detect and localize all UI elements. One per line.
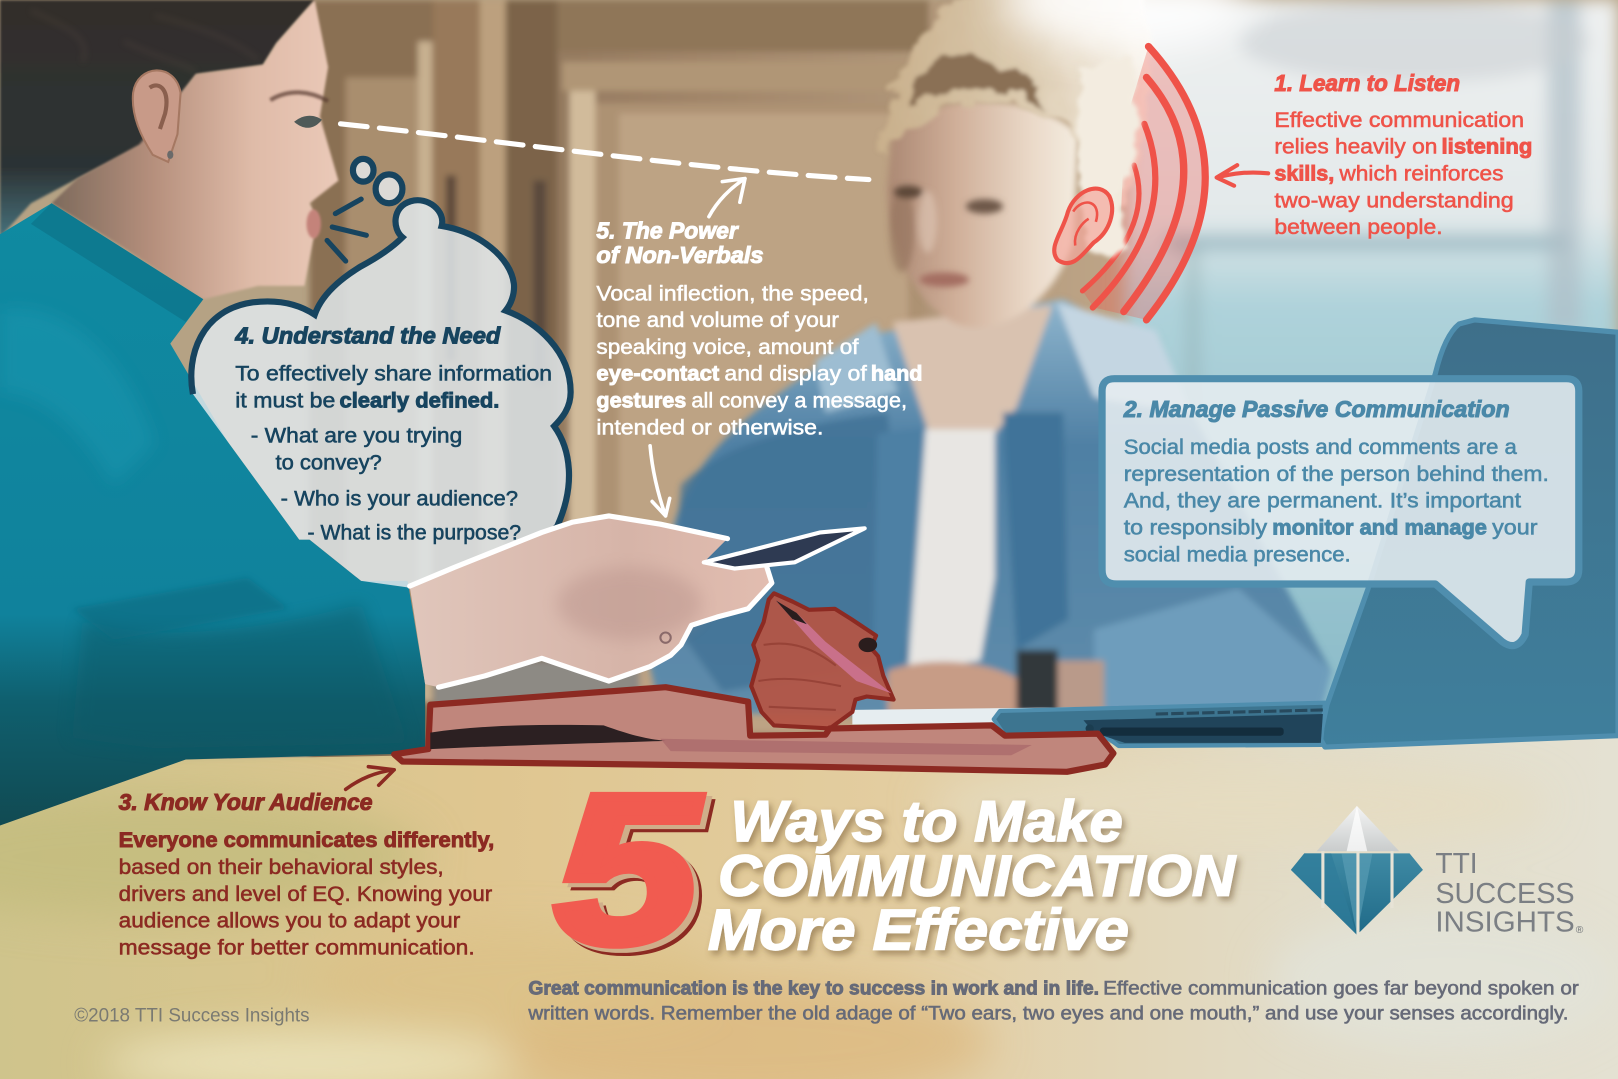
laptop base — [994, 703, 1325, 746]
ring — [660, 633, 671, 643]
panel: 5 the power of non-verbals — [596, 179, 923, 516]
title block — [555, 751, 1236, 994]
panel: 2 manage passive communication speech bubble — [1102, 379, 1579, 646]
wordmark: ® — [1576, 925, 1584, 936]
text: social media copy: to responsibly — [1124, 514, 1267, 539]
laptop highlighted in blue — [852, 320, 1618, 747]
text: listening copy — [1274, 107, 1532, 239]
panel: 4 thought bubble — [191, 159, 571, 588]
text: bubble copy: To effectively share information — [235, 361, 552, 386]
big numeral 5: 5 — [555, 751, 702, 987]
sweater — [0, 203, 425, 825]
heading: Ways to Make Communication More Effective: COMMUNICATION — [718, 845, 1236, 909]
hand outline — [410, 516, 772, 687]
shirt — [629, 299, 1331, 717]
brow, eye, lips — [270, 92, 328, 238]
heading: Ways to Make Communication More Effective — [708, 790, 1236, 962]
heading: Ways to Make Communication More Effective: Ways to Make — [731, 790, 1123, 854]
thought circles — [353, 159, 402, 203]
text: non-verbals copy — [596, 280, 923, 439]
intro text — [527, 979, 1579, 1024]
arrow up to sight line — [709, 179, 745, 217]
text: bubble copy: clearly defined. — [339, 388, 499, 413]
text: non-verbals copy: Vocal inflection, the speed, — [596, 280, 869, 305]
icon: sound waves around ear — [1082, 46, 1205, 320]
text: listening copy: which reinforces — [1338, 161, 1504, 186]
hand fill — [410, 516, 772, 687]
text: listening copy: two-way understanding — [1274, 187, 1514, 212]
photo: woman on the left — [0, 0, 425, 825]
big numeral 5: 5 — [563, 758, 710, 994]
big numeral 5: 5 — [560, 755, 707, 991]
text: bubble copy: - What is the purpose? — [308, 520, 521, 545]
text: audience copy: audience allows you to adapt your — [119, 908, 460, 933]
text: social media copy: your — [1492, 514, 1538, 539]
text: non-verbals copy: speaking voice, amount of — [596, 334, 860, 359]
wordmark — [1435, 848, 1584, 939]
hair — [0, 0, 315, 237]
pen — [776, 601, 892, 693]
text: non-verbals copy: all convey a message, — [691, 388, 907, 413]
heading: Learn to Listen: 1. Learn to Listen — [1274, 70, 1460, 96]
text: social media copy: And, they are permanent. It’s important — [1124, 488, 1521, 513]
placket — [1003, 413, 1068, 650]
speech bubble — [1102, 379, 1579, 646]
heading: The Power of Non-Verbals: of Non-Verbals — [596, 242, 764, 268]
heading: Understand the Need: 4. Understand the Need — [234, 323, 502, 349]
wordmark: TTI — [1435, 848, 1478, 880]
text: non-verbals copy: hand — [871, 361, 923, 386]
text: listening copy: skills, — [1274, 161, 1334, 186]
notebook and papers highlighted in red — [394, 593, 1113, 772]
text: bubble copy: - What are you trying — [251, 423, 462, 448]
thought bubble outline — [191, 200, 571, 543]
heading: The Power of Non-Verbals: 5. The Power — [596, 217, 739, 243]
icon: diamond — [1291, 806, 1423, 935]
speech tick marks — [327, 199, 366, 261]
intro text: Great communication is the key to success in work and in life. — [528, 979, 1099, 1000]
text: bubble copy: - Who is your audience? — [281, 486, 518, 511]
text: listening copy: relies heavily on — [1274, 134, 1437, 159]
logo: TTI Success Insights — [1291, 806, 1584, 939]
table surface — [0, 735, 1618, 1079]
red hand holding pen — [751, 593, 894, 728]
icon: ear — [1054, 189, 1112, 263]
thought bubble fill — [191, 200, 571, 588]
text: social media copy — [1124, 434, 1549, 566]
laptop lid — [1320, 320, 1618, 747]
heading: The Power of Non-Verbals — [596, 217, 764, 268]
tablet strip — [852, 707, 1105, 724]
text: listening copy: Effective communication — [1274, 107, 1524, 132]
text: non-verbals copy: eye-contact — [596, 361, 719, 386]
phone — [704, 528, 865, 569]
hand with phone outlined in white — [410, 516, 865, 687]
text: non-verbals copy: gestures — [596, 388, 686, 413]
heading: Manage Passive Communication: 2. Manage Passive Communication — [1123, 396, 1510, 422]
intro text: Effective communication goes far beyond spoken or — [1103, 979, 1579, 1000]
face and neck — [52, 0, 338, 299]
text: listening copy: between people. — [1274, 214, 1443, 239]
text: listening copy: listening — [1442, 134, 1532, 159]
text: social media copy: Social media posts and comments are a — [1124, 434, 1518, 459]
text: non-verbals copy: intended or otherwise. — [596, 414, 823, 439]
panel: 1 learn to listen — [1054, 46, 1532, 320]
heading: Ways to Make Communication More Effective: More Effective — [708, 898, 1129, 962]
text: audience copy: drivers and level of EQ. Knowing your — [119, 881, 492, 906]
heading: Know Your Audience: 3. Know Your Audience — [119, 789, 373, 815]
white tee — [908, 429, 995, 671]
notebook and desk papers — [394, 687, 1113, 772]
ear — [133, 70, 181, 162]
intro text: written words. Remember the old adage of “Two ears, two eyes and one mouth,” and use your senses accordingly. — [527, 1003, 1568, 1024]
wordmark: SUCCESS — [1435, 878, 1575, 910]
arrow to notebook — [346, 767, 394, 789]
text: social media copy: monitor and manage — [1272, 514, 1487, 539]
arrow to ear — [1217, 165, 1268, 186]
dashed sight line — [341, 124, 869, 180]
text: non-verbals copy: tone and volume of your — [596, 307, 839, 332]
hair over waves — [1079, 62, 1139, 258]
hair — [882, 0, 1150, 215]
text: social media copy: representation of the person behind them. — [1124, 461, 1549, 486]
text: non-verbals copy: and display of — [724, 361, 868, 386]
text: audience copy: message for better communication. — [119, 934, 475, 959]
text: bubble copy — [235, 361, 552, 545]
text: audience copy: Everyone communicates differently, — [119, 827, 494, 852]
text: audience copy — [119, 827, 494, 959]
wordmark: INSIGHTS — [1435, 907, 1575, 939]
finger creases — [758, 644, 841, 710]
copyright: ©2018 TTI Success Insights — [74, 1005, 310, 1027]
photo: woman on the right — [629, 0, 1331, 717]
chest — [893, 305, 1053, 439]
text: audience copy: based on their behavioral styles, — [119, 854, 444, 879]
text: bubble copy: it must be — [235, 388, 335, 413]
text: bubble copy: to convey? — [276, 449, 382, 474]
face — [887, 102, 1078, 328]
arrow down to hand — [650, 446, 670, 516]
text: social media copy: social media presence. — [1124, 541, 1351, 566]
panel: 3 know your audience — [119, 767, 494, 959]
